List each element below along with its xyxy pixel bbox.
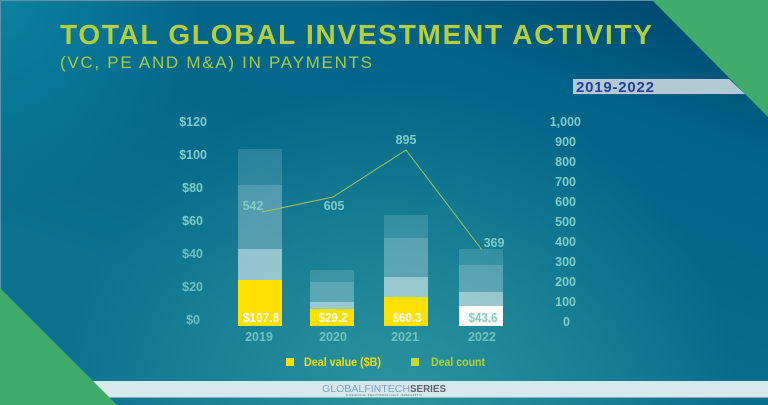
left axis: deal value: $120: [179, 115, 207, 129]
right axis: deal count: 800: [555, 155, 576, 169]
left axis: deal value: $80: [182, 181, 203, 195]
left axis: deal value: $60: [182, 214, 203, 228]
title: TOTAL GLOBAL INVESTMENT ACTIVITY: [60, 19, 652, 50]
right axis: deal count: 100: [555, 295, 576, 309]
stacked bar 2020: [310, 270, 354, 326]
right axis: deal count: 900: [555, 135, 576, 149]
footer logo: GLOBALFINTECH: [322, 383, 410, 395]
subtitle: (VC, PE AND M&A) IN PAYMENTS: [60, 53, 372, 72]
right axis: deal count: [550, 115, 581, 329]
right axis: deal count: 700: [555, 175, 576, 189]
left axis: deal value: $20: [182, 280, 203, 294]
right axis: deal count: 200: [555, 275, 576, 289]
deal count line: [262, 150, 482, 250]
deal count labels: 605: [324, 199, 344, 213]
bar value labels: $60.3: [392, 310, 422, 325]
year labels: 2022: [468, 330, 496, 344]
year labels: 2019: [245, 330, 273, 344]
year labels: 2020: [319, 330, 347, 344]
legend: Deal value ($B): [304, 357, 381, 369]
year labels: [245, 330, 496, 344]
right axis: deal count: 1,000: [550, 115, 581, 129]
left axis: deal value: $40: [182, 247, 203, 261]
footer logo: FINANCE TECHNOLOGY INSIGHTS: [346, 394, 423, 397]
left axis: deal value: [179, 115, 207, 327]
footer logo: SERIES: [410, 383, 446, 395]
bar value labels: $29.2: [318, 310, 348, 325]
legend: [286, 357, 485, 369]
footer logo: [322, 383, 446, 397]
left axis: deal value: $100: [179, 148, 207, 162]
right axis: deal count: 600: [555, 195, 576, 209]
year labels: 2021: [391, 330, 419, 344]
date range label: [573, 79, 745, 96]
right axis: deal count: 400: [555, 235, 576, 249]
left axis: deal value: $0: [186, 313, 200, 327]
right axis: deal count: 0: [563, 315, 570, 329]
right axis: deal count: 300: [555, 255, 576, 269]
bar value labels: $43.6: [468, 310, 498, 325]
deal count labels: 895: [396, 133, 416, 147]
green corner triangle top right: [652, 0, 768, 117]
deal count labels: 369: [484, 236, 504, 250]
green corner triangle bottom left: [0, 288, 117, 405]
stacked bar 2021: [384, 215, 428, 326]
stacked bar 2019: [238, 149, 282, 326]
stacked bar 2022: [459, 249, 503, 326]
deal count labels: [243, 133, 504, 250]
legend: Deal count: [431, 357, 485, 369]
date range label: 2019-2022: [576, 79, 654, 96]
bar value labels: [243, 310, 498, 325]
bottom footer strip: [90, 381, 768, 398]
bar value labels: $107.8: [243, 310, 279, 325]
right axis: deal count: 500: [555, 215, 576, 229]
deal count labels: 542: [243, 199, 263, 213]
